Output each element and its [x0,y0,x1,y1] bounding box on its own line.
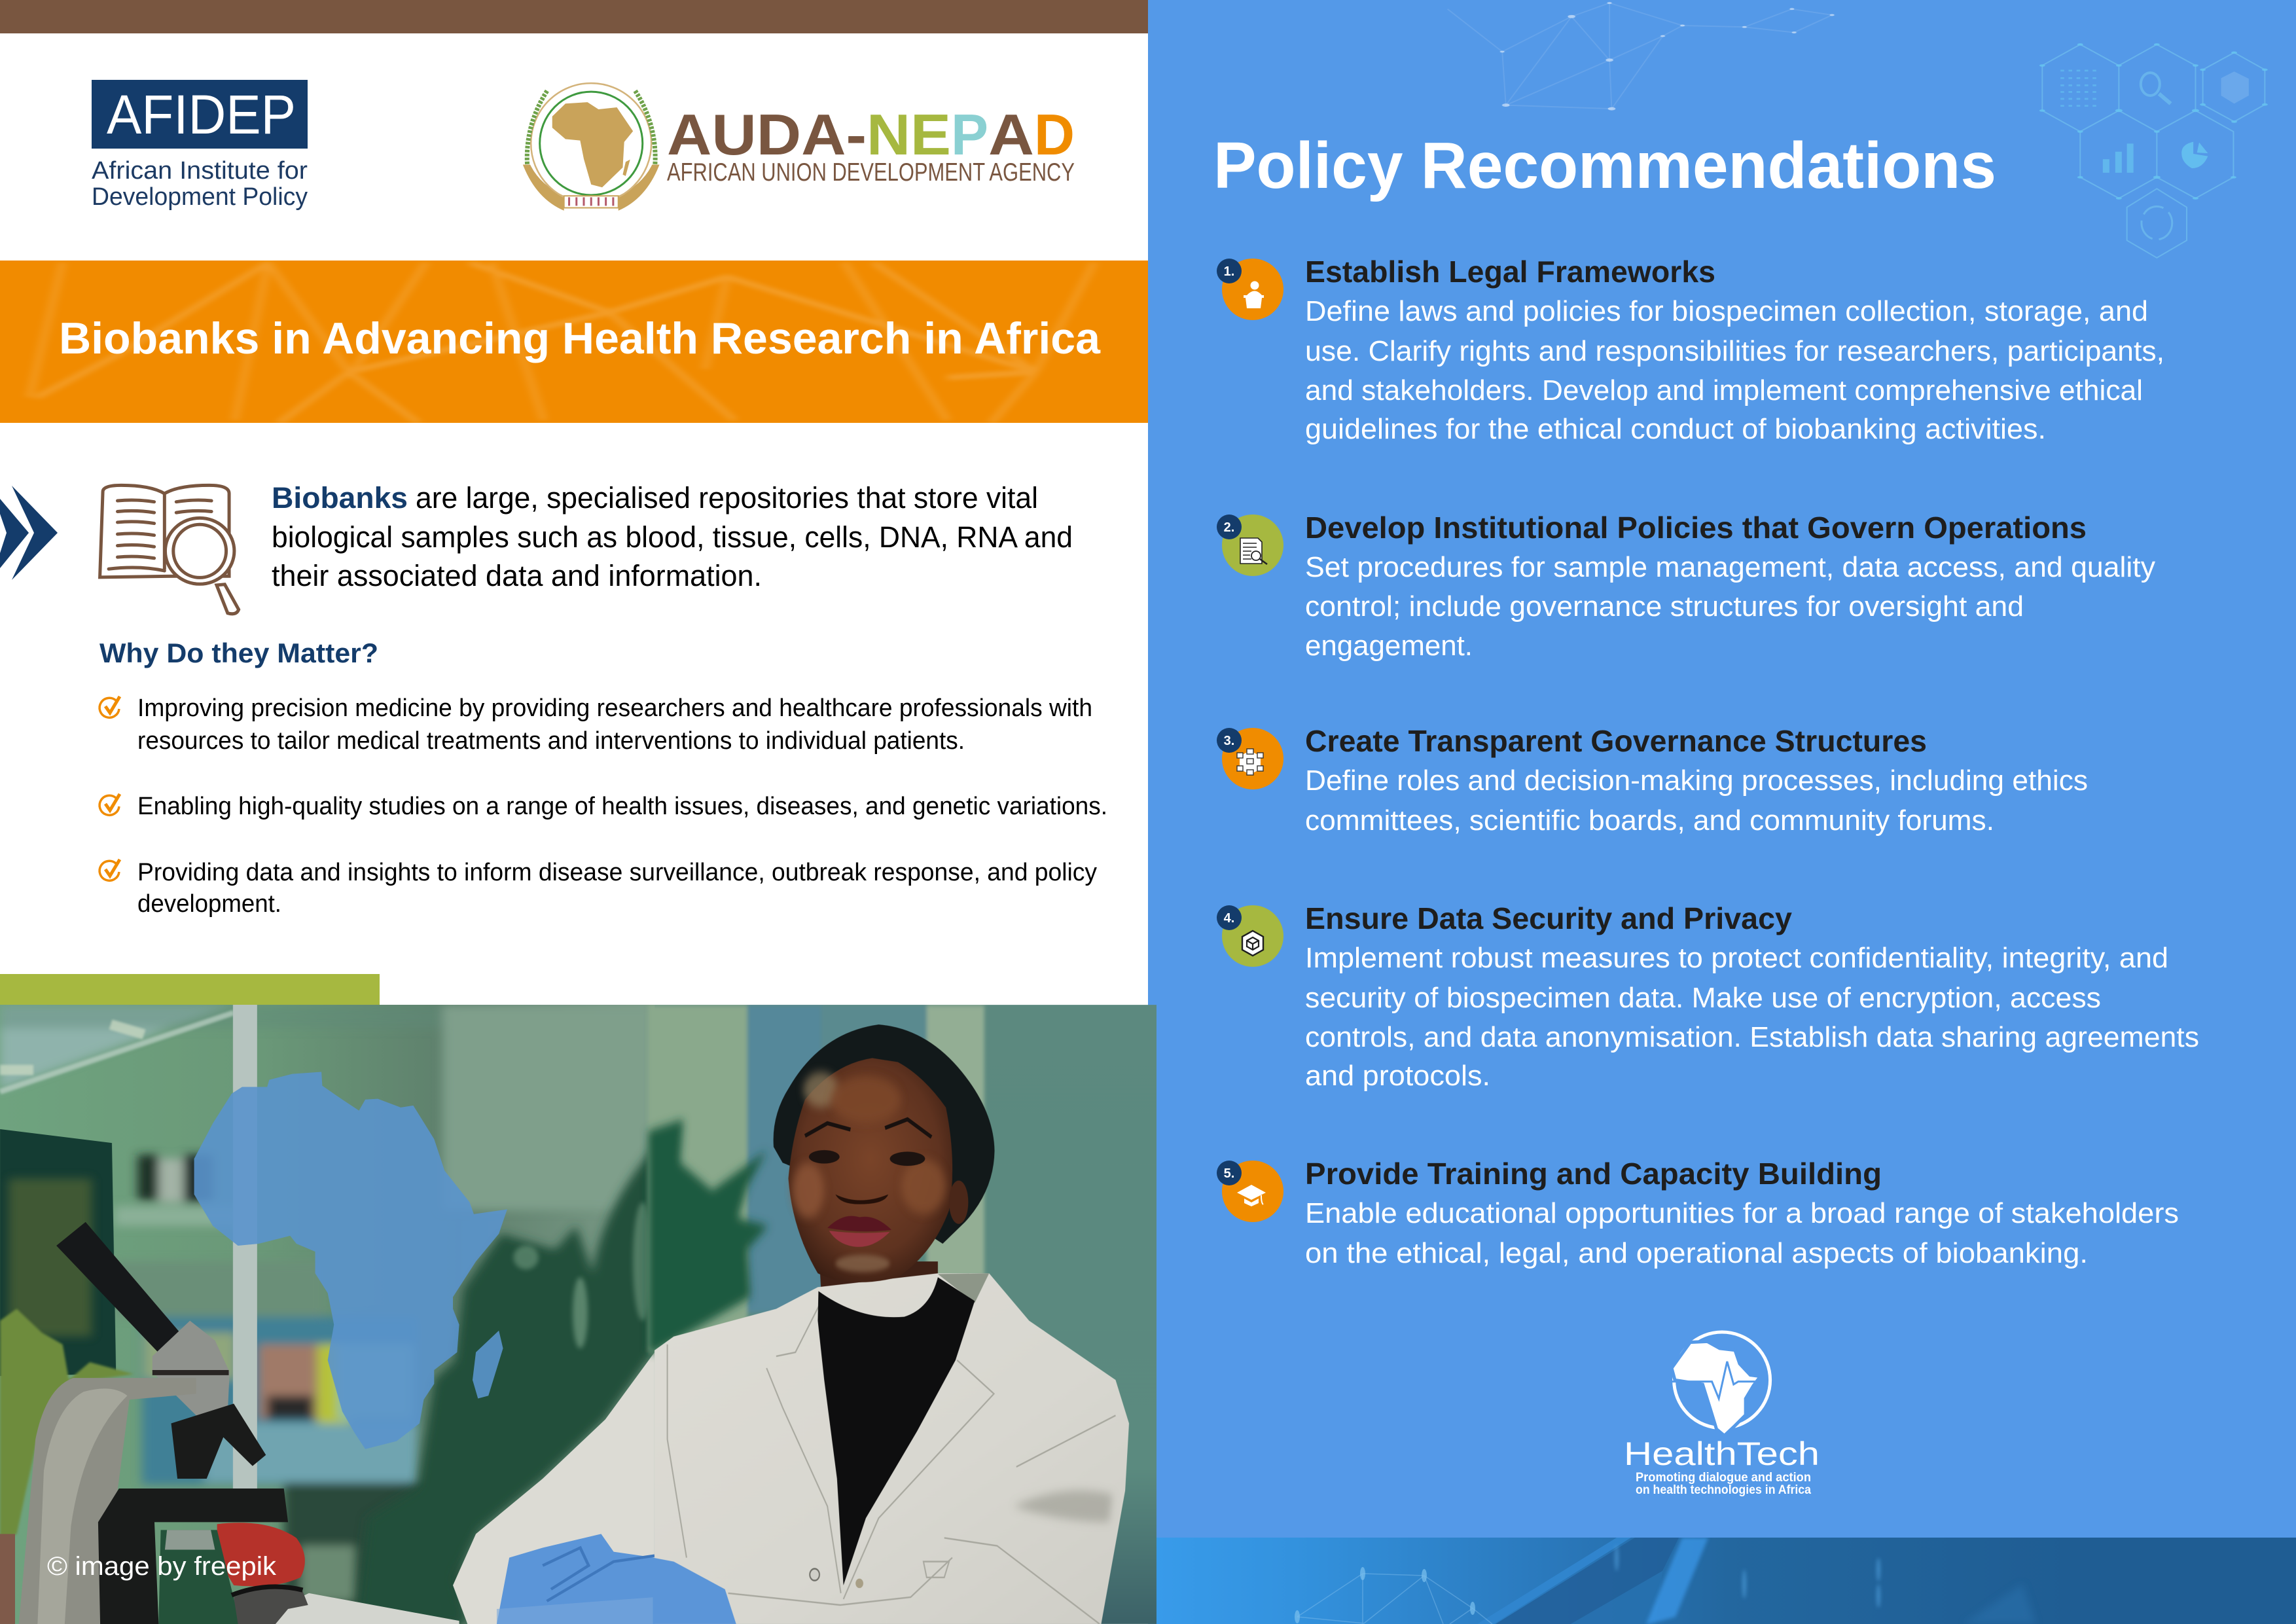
top brown bar [0,0,1148,33]
icon: graduation cap: 5. [1224,1166,1234,1181]
plants [355,1147,655,1624]
title: Policy Recommendations: Policy Recommendations [1213,129,1996,202]
left greenery [0,1309,134,1542]
body text [1305,942,2199,1092]
logo: AUDA-NEPAD: D [1034,102,1075,167]
icon: graduation cap [1217,1161,1283,1222]
plant pot [0,1534,15,1624]
title: Biobanks in Advancing Health Research in Africa [59,314,1101,363]
nose [835,1195,888,1204]
decorative network top [1448,2,1835,110]
icon: document search [1217,514,1283,576]
icon: network cubes: 3. [1224,734,1234,748]
body text: Implement robust measures to protect confidentiality, integrity, and [1305,942,2168,974]
logo: AUDA-NEPAD: P [951,102,988,167]
brows and eyes [805,1119,931,1137]
green flask [158,1530,240,1624]
icon: check 2 [99,794,120,815]
microscope [19,1222,288,1624]
logo: AFIDEP [92,80,308,211]
body text: control; include governance structures for oversight and [1305,590,2024,623]
left half of photo: lab and microscope [0,1005,655,1624]
icon: navy chevrons [0,486,58,580]
black top [817,1277,975,1585]
body text [1305,1197,2179,1269]
logo: HealthTech [1624,1332,1820,1497]
logo: AUDA-NEPAD: A [988,102,1034,167]
gloved hand [497,1534,655,1624]
body text: controls, and data anonymisation. Establish data sharing agreements [1305,1021,2199,1053]
body text: Define roles and decision-making processes, including ethics [1305,765,2088,797]
icon: African Union emblem [523,83,660,211]
panel: blue policy background [1148,0,2296,1624]
text block: biobanks definition: biological samples such as blood, tissue, cells, DNA, RNA and [272,520,1073,554]
map: Africa overlay [194,1072,507,1449]
body text: committees, scientific boards, and community forums. [1305,804,1994,837]
logo: AUDA-NEPAD [523,83,1075,211]
neck [819,1261,938,1321]
list: reasons [99,695,1107,918]
icon: Africa with heartbeat [1672,1332,1770,1435]
caption: image credit: © image by freepik [47,1552,277,1581]
right half of photo: scientist [648,1005,1157,1624]
item 4: data security [1217,901,2199,1092]
lab coat [655,1273,1129,1624]
body text [1305,295,2164,445]
logo: AUDA-NEPAD: AUDA- [667,102,867,167]
icon: secure hexagon [1217,905,1283,967]
mouse and desk [276,1593,459,1624]
body text: and protocols. [1305,1060,1490,1092]
text block: biobanks definition: Biobanks [272,481,408,514]
tomato [217,1523,305,1586]
text block: biobanks definition: their associated data and information. [272,559,762,592]
bullet 2: Enabling high-quality studies on a range of health issues, diseases, and genetic variations. [137,793,1107,820]
logo: AUDA-NEPAD: NE [867,102,951,167]
bullet 1: Improving precision medicine by providing researchers and healthcare professionals with [137,695,1092,722]
body text [1305,765,2088,837]
logo: AUDA-NEPAD: AFRICAN UNION DEVELOPMENT AGENCY [667,158,1075,187]
hair [774,1024,995,1244]
body text [1305,551,2155,662]
logo: HealthTech: on health technologies in Africa [1636,1483,1811,1497]
icon: document search: 2. [1224,520,1234,535]
arm glove [653,1558,736,1624]
heading: Establish Legal Frameworks [1305,255,1715,289]
icon: check 3 [99,859,120,880]
icon: podium [1217,259,1283,320]
ear [949,1180,968,1224]
icon: podium: 1. [1224,264,1234,279]
icon: secure hexagon: 4. [1224,911,1234,926]
body text: Enable educational opportunities for a broad range of stakeholders [1305,1197,2179,1229]
body text: engagement. [1305,630,1473,662]
sleeve [453,1352,655,1624]
text block: biobanks definition [272,481,1073,592]
bullet 3: development. [137,890,281,918]
lips [827,1216,891,1231]
panel: white left background [0,0,1148,1624]
body text: Set procedures for sample management, data access, and quality [1305,551,2155,583]
heading: Provide Training and Capacity Building [1305,1157,1882,1191]
heading: Develop Institutional Policies that Govern Operations [1305,511,2087,545]
heading: Create Transparent Governance Structures [1305,724,1927,758]
decorative hexagon icons [2039,43,2268,258]
heading: Ensure Data Security and Privacy [1305,901,1792,935]
item 5: training [1217,1157,2179,1269]
item 2: institutional policies [1217,511,2155,662]
body text: on the ethical, legal, and operational aspects of biobanking. [1305,1237,2088,1269]
item 1: legal frameworks [1217,255,2164,445]
icon: check 1 [99,696,120,717]
photo: scientist in laboratory [0,1005,1157,1624]
body text: use. Clarify rights and responsibilities for researchers, participants, [1305,335,2164,367]
panel: bottom blue band [1157,1538,2296,1624]
face [788,1058,952,1282]
logo: HealthTech: Promoting dialogue and action [1636,1471,1811,1485]
logo: HealthTech: HealthTech [1624,1435,1820,1472]
logo: AFIDEP: African Institute for [92,157,308,185]
bullet 3: Providing data and insights to inform disease surveillance, outbreak response, and policy [137,859,1097,886]
bullet 1 [137,695,1092,755]
heading: why they matter: Why Do they Matter? [99,638,378,668]
bullet 1: resources to tailor medical treatments and interventions to individual patients. [137,727,965,755]
body text: security of biospecimen data. Make use of encryption, access [1305,982,2101,1014]
green accent bar [0,974,380,1005]
item 3: governance structures [1217,724,2088,837]
body text: and stakeholders. Develop and implement comprehensive ethical [1305,374,2143,406]
body text: guidelines for the ethical conduct of biobanking activities. [1305,413,2046,445]
white column [233,1005,257,1490]
buttons [810,1569,819,1581]
logo: AFIDEP: Development Policy [92,183,308,211]
bullet 3 [137,859,1097,918]
body text: Define laws and policies for biospecimen collection, storage, and [1305,295,2148,327]
icon: network cubes [1217,728,1283,789]
logo: AFIDEP: AFIDEP [107,84,296,145]
monitor [0,1129,116,1376]
coat folds [668,1305,1115,1624]
icon: book and magnifier [100,485,239,614]
text block: biobanks definition: are large, specialised repositories that store vital [416,481,1038,514]
panel: orange title band [0,261,1148,423]
